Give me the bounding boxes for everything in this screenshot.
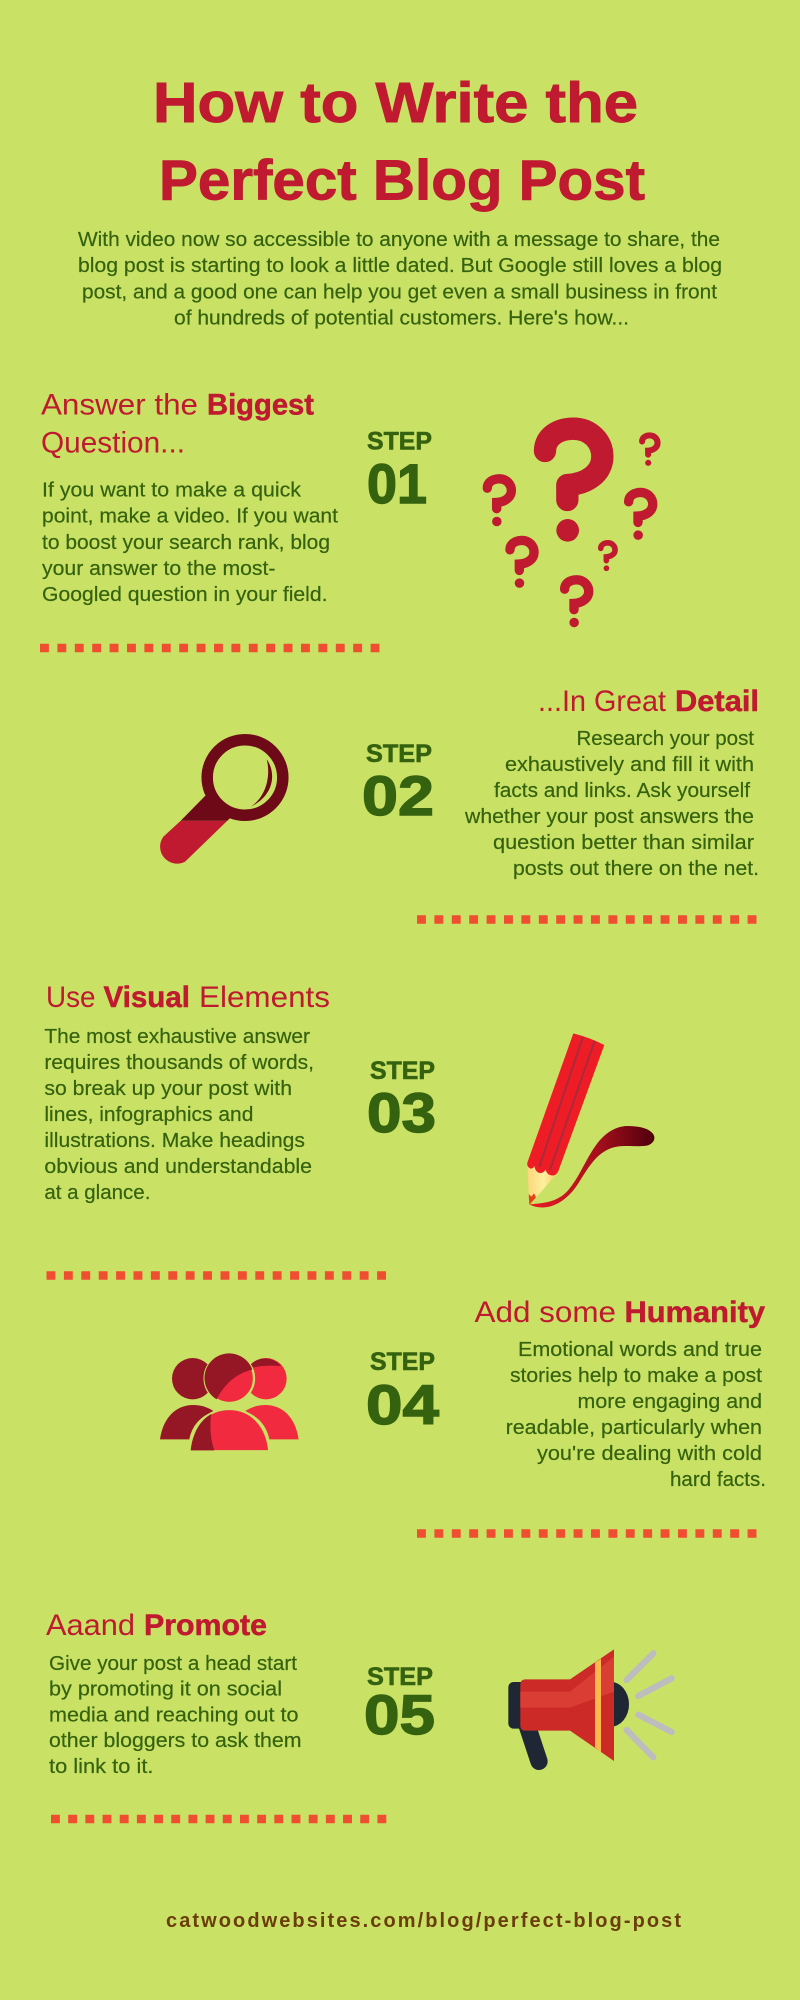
body text: step 5: Give your post a head start: [49, 1652, 297, 1675]
step label 02: 02: [362, 764, 434, 827]
body text: step 4: Emotional words and true: [518, 1338, 762, 1361]
body text: step 4: [506, 1338, 766, 1491]
body text: step 3: so break up your post with: [44, 1077, 292, 1100]
heading: add some humanity: Humanity: [624, 1296, 766, 1329]
heading: in great detail: ...In Great: [538, 685, 666, 718]
heading: add some humanity: Add some: [474, 1296, 616, 1329]
heading: use visual elements: Elements: [199, 981, 330, 1014]
icon: red pencil with squiggle: [527, 1033, 654, 1207]
step label 02: STEP: [366, 740, 432, 768]
heading: aaand promote: Aaand: [46, 1609, 135, 1642]
body text: step 4: hard facts.: [670, 1468, 766, 1491]
body text: step 4: you're dealing with cold: [537, 1442, 762, 1465]
body text: step 3: illustrations. Make headings: [44, 1129, 305, 1152]
step label 05: 05: [364, 1683, 435, 1746]
heading: answer the biggest question: Question...: [41, 426, 185, 460]
heading: use visual elements: Visual: [104, 981, 190, 1014]
step label 02: [362, 740, 434, 827]
body text: step 4: more engaging and: [578, 1390, 762, 1413]
step label 05: STEP: [367, 1663, 433, 1691]
body text: step 5: by promoting it on social: [49, 1678, 282, 1700]
heading: aaand promote: Promote: [144, 1609, 267, 1642]
body text: step 1: your answer to the most-: [42, 557, 276, 580]
heading: answer the biggest question: [41, 388, 314, 460]
title: [153, 71, 645, 212]
panel: step 3: [44, 981, 654, 1207]
body text: step 2: Research your post: [576, 727, 754, 750]
intro text: With video now so accessible to anyone with a message to share, the: [78, 228, 720, 251]
panel: step 4: [160, 1296, 766, 1491]
step label 03: STEP: [370, 1057, 435, 1085]
heading: use visual elements: Use: [46, 981, 96, 1014]
body text: step 2: exhaustively and fill it with: [505, 753, 754, 776]
intro text: of hundreds of potential customers. Here's how...: [174, 306, 629, 330]
heading: add some humanity: [474, 1296, 766, 1329]
step label 04: STEP: [370, 1348, 435, 1376]
body text: step 4: stories help to make a post: [510, 1364, 762, 1387]
body text: step 2: question better than similar: [493, 831, 754, 854]
body text: step 3: obvious and understandable: [44, 1155, 312, 1178]
heading: in great detail: Detail: [675, 685, 759, 718]
step label 04: [366, 1348, 439, 1436]
step label 03: [367, 1057, 436, 1144]
body text: step 1: Googled question in your field.: [42, 583, 328, 606]
heading: aaand promote: [46, 1609, 267, 1642]
step label 01: [367, 428, 432, 515]
icon: question marks: [487, 429, 658, 627]
title: Perfect Blog Post: [159, 148, 645, 212]
icon: group of people: [160, 1353, 299, 1451]
body text: step 2: facts and links. Ask yourself: [494, 779, 750, 802]
icon: magnifying glass: [160, 740, 283, 864]
title: How to Write the: [153, 71, 638, 135]
body text: step 3: at a glance.: [44, 1181, 150, 1204]
body text: step 1: If you want to make a quick: [42, 479, 302, 502]
footer url: catwoodwebsites.com/blog/perfect-blog-post: [166, 1910, 681, 1932]
body text: step 2: posts out there on the net.: [513, 857, 759, 880]
heading: answer the biggest question: Biggest: [207, 388, 314, 422]
body text: step 4: readable, particularly when: [506, 1416, 762, 1439]
body text: step 3: The most exhaustive answer: [44, 1025, 310, 1048]
intro text: [78, 228, 722, 330]
body text: step 5: [49, 1652, 302, 1778]
body text: step 1: [42, 479, 338, 606]
step label 05: [364, 1663, 435, 1746]
body text: step 5: other bloggers to ask them: [49, 1729, 302, 1752]
heading: in great detail: [538, 685, 759, 718]
body text: step 5: media and reaching out to: [49, 1704, 298, 1726]
panel: step 5: [46, 1609, 672, 1778]
panel: step 1: [41, 388, 658, 627]
body text: step 1: to boost your search rank, blog: [42, 531, 330, 554]
body text: step 3: requires thousands of words,: [44, 1051, 314, 1074]
body text: step 3: [44, 1025, 314, 1204]
step label 01: 01: [367, 452, 427, 515]
heading: use visual elements: [46, 981, 330, 1014]
intro text: blog post is starting to look a little dated. But Google still loves a blog: [78, 254, 722, 277]
body text: step 2: [464, 727, 759, 880]
icon: megaphone: [508, 1649, 672, 1761]
body text: step 3: lines, infographics and: [44, 1103, 253, 1126]
body text: step 5: to link to it.: [49, 1755, 154, 1778]
heading: answer the biggest question: Answer the: [41, 388, 198, 422]
step label 04: 04: [366, 1373, 439, 1436]
intro text: post, and a good one can help you get even a small business in front: [82, 280, 717, 304]
body text: step 1: point, make a video. If you want: [42, 505, 338, 528]
body text: step 2: whether your post answers the: [464, 805, 754, 828]
step label 03: 03: [367, 1081, 436, 1144]
panel: step 2: [160, 685, 759, 880]
step label 01: STEP: [367, 428, 432, 456]
